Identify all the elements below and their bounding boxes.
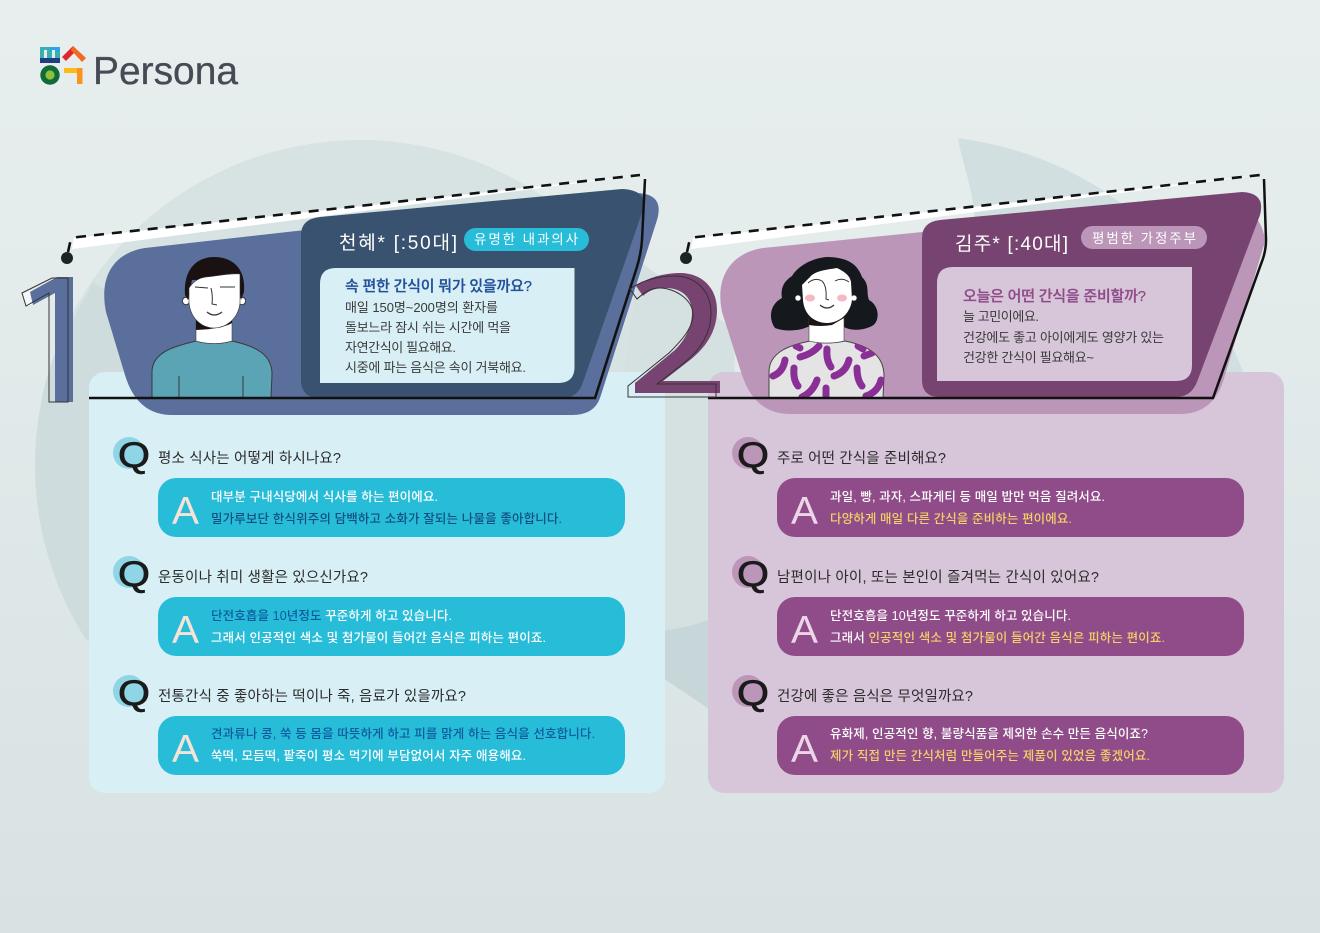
- front card: [922, 192, 1261, 397]
- quote card: 건강한 간식이 필요해요~: [963, 350, 1094, 365]
- quote card: 자연간식이 필요해요.: [345, 340, 456, 355]
- question 1: [732, 436, 946, 475]
- solid frame line: [89, 179, 645, 398]
- quote card: 돌보느라 잠시 쉬는 시간에 먹을: [345, 320, 511, 335]
- icon: logo mark: [40, 46, 86, 85]
- icon: woman portrait: [769, 257, 884, 398]
- background: [0, 0, 1320, 708]
- question 2: 남편이나 아이, 또는 본인이 즐겨먹는 간식이 있어요?: [777, 569, 1099, 586]
- question 1: [113, 436, 341, 475]
- leader dot: [61, 252, 73, 264]
- persona 1 header: [22, 175, 659, 415]
- quote card: [320, 268, 574, 383]
- question 2: Q: [737, 555, 769, 594]
- answer 2: A: [791, 609, 818, 652]
- question 3: 전통간식 중 좋아하는 떡이나 죽, 음료가 있을까요?: [158, 688, 466, 705]
- answer 3: A: [791, 728, 818, 771]
- quote card: 건강에도 좋고 아이에게도 영양가 있는: [963, 330, 1164, 345]
- question 3: [113, 674, 466, 713]
- logo: Persona: [40, 46, 238, 93]
- answer 3: 견과류나 콩, 쑥 등 몸을 따뜻하게 하고 피를 맑게 하는 음식을 선호합니다.: [211, 726, 595, 741]
- question 1: Q: [118, 436, 150, 475]
- Q&A: persona 2: [732, 436, 1244, 775]
- answer 2: 단전호흡을 10년정도 꾸준하게 하고 있습니다.: [830, 608, 1071, 623]
- question 3: 건강에 좋은 음식은 무엇일까요?: [777, 688, 973, 705]
- answer 3: 쑥떡, 모듬떡, 팥죽이 평소 먹기에 부담없어서 자주 애용해요.: [211, 749, 526, 763]
- answer 3: [777, 716, 1244, 775]
- answer 2: 그래서 인공적인 색소 및 첨가물이 들어간 음식은 피하는 편이죠.: [211, 631, 546, 645]
- answer 1: 대부분 구내식당에서 식사를 하는 편이에요.: [211, 490, 438, 504]
- question 1: Q: [737, 436, 769, 475]
- badge: job: [1081, 226, 1207, 249]
- white wedge under dashed line: [691, 175, 1260, 249]
- back card: [104, 193, 659, 415]
- answer 1: [777, 478, 1244, 537]
- answer 3: [158, 716, 625, 775]
- front card: [301, 189, 644, 398]
- question 1: 주로 어떤 간식을 준비해요?: [777, 450, 946, 467]
- question 2: 운동이나 취미 생활은 있으신가요?: [158, 569, 368, 586]
- answer 1: A: [791, 490, 818, 533]
- question 2: Q: [118, 555, 150, 594]
- quote card: 오늘은 어떤 간식을 준비할까?: [963, 288, 1146, 305]
- question 2: [113, 555, 368, 594]
- white wedge under dashed line: [72, 175, 640, 249]
- answer 2: [777, 597, 1244, 656]
- answer 3: 유화제, 인공적인 향, 불량식품을 제외한 손수 만든 음식이죠?: [830, 726, 1148, 741]
- answer 1: A: [172, 490, 199, 533]
- persona 2 header: [628, 175, 1266, 414]
- back card: [720, 200, 1264, 414]
- dashed leader line: [687, 175, 1260, 252]
- answer 2: 그래서 인공적인 색소 및 첨가물이 들어간 음식은 피하는 편이죠.: [830, 631, 1165, 645]
- answer 2: [158, 597, 625, 656]
- answer 1: [158, 478, 625, 537]
- persona name: 김주* [:40대]: [955, 233, 1068, 255]
- leader dot: [680, 252, 692, 264]
- answer 1: 밀가루보단 한식위주의 담백하고 소화가 잘되는 나물을 좋아합니다.: [211, 511, 562, 526]
- answer 2: 단전호흡을 10년정도 꾸준하게 하고 있습니다.: [211, 608, 452, 623]
- answer 3: 제가 직접 만든 간식처럼 만들어주는 제품이 있었음 좋겠어요.: [830, 749, 1150, 763]
- question 3: [732, 674, 973, 713]
- number 1: [22, 277, 73, 402]
- answer 1: 과일, 빵, 과자, 스파게티 등 매일 밥만 먹음 질려서요.: [830, 489, 1105, 504]
- panel: persona 2 Q&A background: [708, 372, 1284, 793]
- icon: man portrait: [152, 257, 272, 398]
- Q&A: persona 1: [113, 436, 625, 775]
- quote card: 속 편한 간식이 뭐가 있을까요?: [345, 278, 532, 295]
- persona name: 천혜* [:50대]: [339, 232, 457, 254]
- answer 3: A: [172, 728, 199, 771]
- answer 2: A: [172, 609, 199, 652]
- quote card: 늘 고민이에요.: [963, 309, 1039, 324]
- question 2: [732, 555, 1099, 594]
- quote card: [937, 267, 1192, 381]
- question 3: Q: [118, 674, 150, 713]
- badge: job: 유명한 내과의사: [474, 232, 579, 247]
- dashed leader line: [68, 175, 640, 252]
- logo wordmark: Persona: [93, 50, 238, 93]
- quote card: 시중에 파는 음식은 속이 거북해요.: [345, 360, 526, 375]
- number 2: [628, 273, 720, 397]
- question 3: Q: [737, 674, 769, 713]
- solid frame line: [708, 179, 1266, 398]
- quote card: 매일 150명~200명의 환자를: [345, 300, 498, 315]
- answer 1: 다양하게 매일 다른 간식을 준비하는 편이에요.: [830, 511, 1072, 526]
- badge: job: 평범한 가정주부: [1092, 231, 1196, 246]
- badge: job: [464, 228, 589, 251]
- question 1: 평소 식사는 어떻게 하시나요?: [158, 450, 341, 467]
- panel: persona 1 Q&A background: [89, 372, 665, 793]
